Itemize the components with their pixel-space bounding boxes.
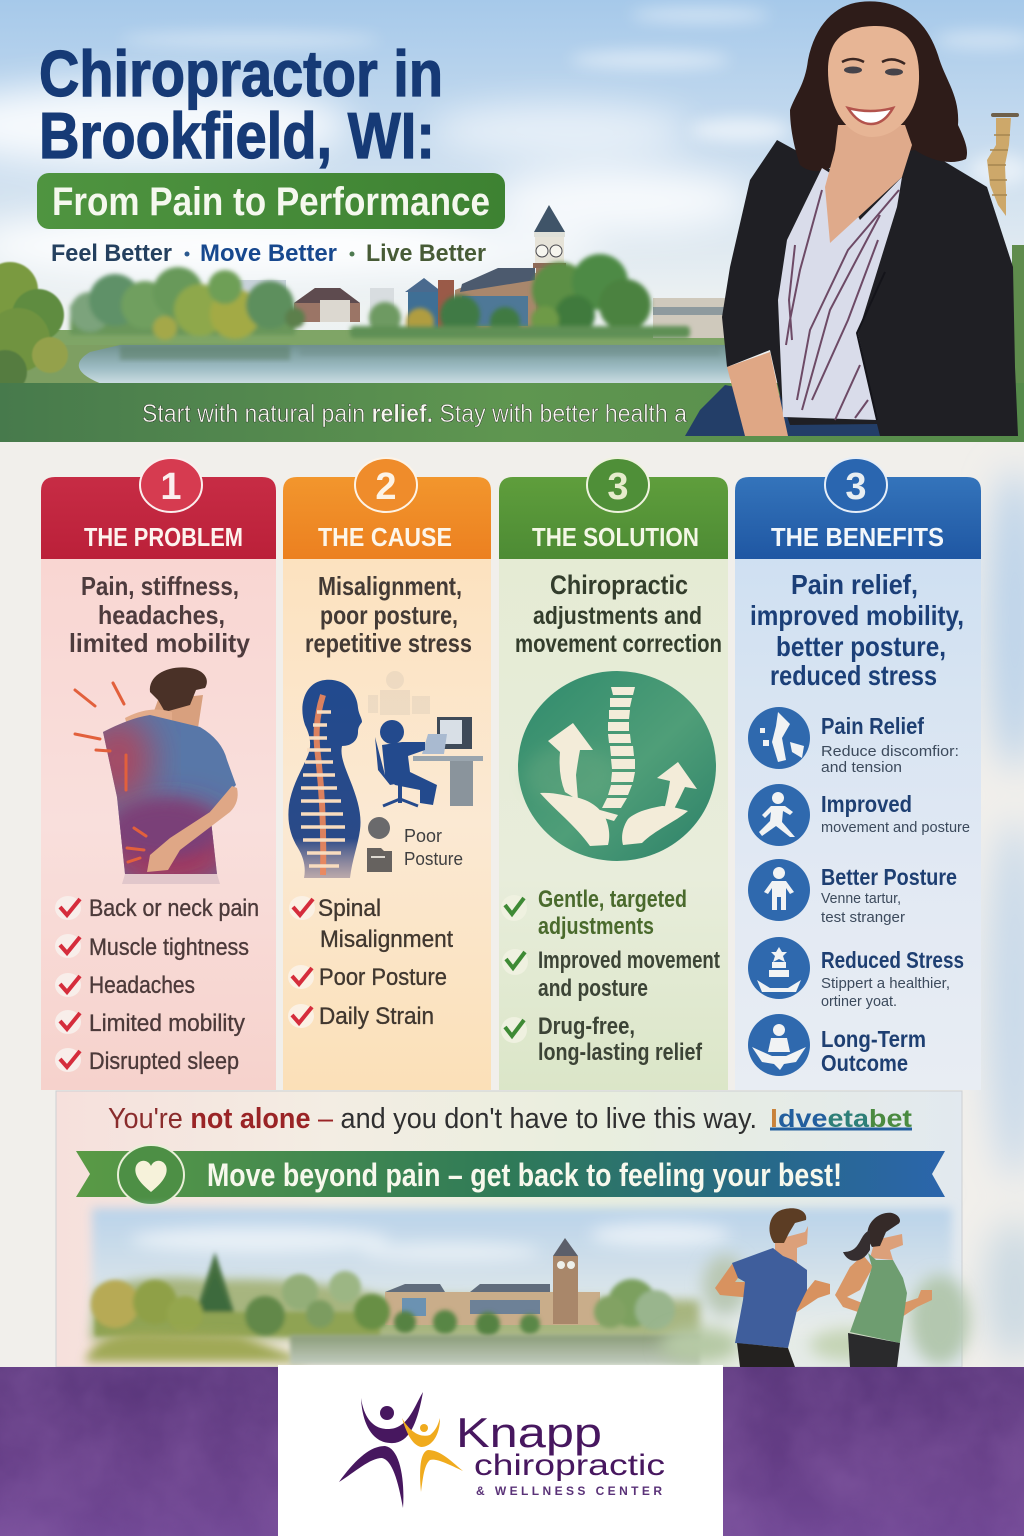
back hair bbox=[790, 1, 967, 171]
benefit: long-term outcome: Long-Term bbox=[821, 1026, 926, 1052]
right side treeline bbox=[1012, 245, 1024, 440]
illustration: spine and hands globe bbox=[518, 671, 716, 861]
logo wordmark bbox=[456, 1409, 665, 1498]
checklist: cause: Poor Posture bbox=[319, 964, 447, 991]
tagline: Feel Better bbox=[51, 240, 172, 267]
solution summary: movement correction bbox=[515, 630, 722, 658]
checklist: solution: long-lasting relief bbox=[538, 1039, 703, 1066]
purple footer band bbox=[0, 1367, 1024, 1536]
main title: Chiropractor in bbox=[39, 37, 443, 110]
cause summary: Misalignment, bbox=[318, 571, 462, 601]
checklist: problem: Headaches bbox=[89, 972, 195, 999]
illustration: spine silhouette bbox=[288, 680, 362, 878]
hero strapline: Start with natural pain relief. Stay with better health a bbox=[142, 400, 687, 428]
panel: the cause bbox=[283, 458, 491, 1090]
checklist: solution: and posture bbox=[538, 975, 648, 1002]
header: the problem bbox=[41, 458, 276, 559]
trees bbox=[91, 1252, 675, 1336]
cause summary bbox=[305, 571, 472, 658]
checklist: cause bbox=[288, 895, 453, 1030]
benefit: long-term outcome bbox=[748, 1014, 926, 1076]
header: the benefits bbox=[735, 458, 981, 559]
problem summary: limited mobility bbox=[69, 628, 251, 658]
header: the solution: THE SOLUTION bbox=[532, 522, 699, 552]
benefits summary: better posture, bbox=[776, 631, 946, 662]
icon: heart badge bbox=[118, 1145, 184, 1205]
panel: the solution bbox=[499, 458, 728, 1090]
checklist: problem: Back or neck pain bbox=[89, 895, 259, 922]
benefit: reduced stress: ortiner yoat. bbox=[821, 993, 897, 1010]
blouse bbox=[778, 125, 912, 420]
benefit: better posture: Better Posture bbox=[821, 864, 957, 890]
tagline: Live Better bbox=[366, 240, 486, 267]
header: the solution bbox=[499, 458, 728, 559]
solution summary: adjustments and bbox=[533, 602, 702, 630]
benefit: pain relief: Reduce discomfior: bbox=[821, 743, 959, 760]
far hills bbox=[90, 1278, 700, 1340]
jeans bbox=[685, 385, 885, 436]
checklist: problem: Disrupted sleep bbox=[89, 1048, 239, 1075]
benefit: better posture bbox=[748, 859, 957, 926]
illustration: man with back pain bbox=[75, 667, 238, 892]
reassurance panel bbox=[56, 1091, 970, 1367]
benefit: better posture: test stranger bbox=[821, 909, 905, 926]
poor posture note bbox=[367, 817, 463, 872]
campus building and clock tower bbox=[385, 1238, 600, 1325]
benefits summary: reduced stress bbox=[770, 660, 937, 691]
lower landscape scene bbox=[85, 1208, 970, 1367]
checklist: solution bbox=[501, 886, 720, 1066]
grass strip bbox=[0, 383, 1024, 442]
checklist: cause: Misalignment bbox=[320, 926, 453, 953]
tagline bbox=[51, 240, 486, 267]
panel: the benefits bbox=[735, 458, 981, 1090]
ribbon banner: Move beyond pain – get back to feeling your best! bbox=[207, 1157, 842, 1193]
logo wordmark: chiropractic bbox=[474, 1449, 665, 1482]
sky with clouds bbox=[0, 0, 1024, 442]
runner: man bbox=[715, 1208, 830, 1367]
checklist: problem: Muscle tightness bbox=[89, 934, 249, 961]
solution summary: Chiropractic bbox=[550, 570, 688, 600]
main title bbox=[39, 37, 443, 172]
checklist: problem bbox=[55, 895, 259, 1075]
garbled wordmark: ldve etabet bbox=[770, 1105, 913, 1133]
right side sky wash bbox=[985, 470, 1024, 1360]
benefits summary bbox=[750, 569, 964, 691]
benefit: improved bbox=[748, 784, 970, 846]
benefit: better posture: Venne tartur, bbox=[821, 890, 901, 907]
jacket bbox=[722, 138, 1018, 436]
header: the benefits: THE BENEFITS bbox=[771, 522, 944, 552]
poor posture note: Poor bbox=[404, 826, 442, 846]
header: the cause: 2 bbox=[375, 466, 397, 508]
header: the problem: THE PROBLEM bbox=[84, 522, 243, 552]
header: the cause: THE CAUSE bbox=[318, 522, 452, 552]
checklist: cause: Daily Strain bbox=[319, 1003, 434, 1030]
cause summary: poor posture, bbox=[320, 600, 458, 630]
header: the benefits: 3 bbox=[845, 466, 867, 508]
header: the problem: 1 bbox=[160, 466, 182, 508]
runner: woman bbox=[835, 1213, 932, 1367]
foreground shrubs bbox=[85, 1332, 310, 1362]
lakeside landscape bbox=[0, 205, 1024, 442]
benefits summary: Pain relief, bbox=[791, 569, 918, 600]
problem summary: headaches, bbox=[98, 600, 225, 630]
face bbox=[828, 26, 919, 137]
problem summary: Pain, stiffness, bbox=[81, 571, 239, 601]
paper background bbox=[0, 440, 1024, 1370]
panel: the problem bbox=[41, 458, 276, 1090]
checklist: cause: Spinal bbox=[318, 895, 381, 922]
benefit: reduced stress: Stippert a healthier, bbox=[821, 975, 950, 992]
logo card bbox=[278, 1365, 723, 1536]
solution summary bbox=[515, 570, 722, 658]
cause summary: repetitive stress bbox=[305, 628, 472, 658]
benefit: reduced stress bbox=[748, 937, 964, 1010]
spine sculpture bbox=[987, 113, 1019, 216]
checklist: solution: Improved movement bbox=[538, 947, 720, 974]
clock tower bbox=[533, 205, 566, 316]
checklist: solution: adjustments bbox=[538, 913, 654, 940]
far buildings bbox=[220, 268, 725, 338]
portrait bbox=[685, 1, 1018, 436]
benefit: reduced stress: Reduced Stress bbox=[821, 947, 964, 973]
message line: You're not alone – and you don't have to live this way. bbox=[108, 1103, 757, 1135]
tree groups bbox=[70, 254, 690, 340]
benefit: pain relief bbox=[748, 707, 959, 776]
main title: Brookfield, WI: bbox=[39, 99, 435, 172]
benefits summary: improved mobility, bbox=[750, 600, 964, 631]
checklist: problem: Limited mobility bbox=[89, 1010, 245, 1037]
logo wordmark: & WELLNESS CENTER bbox=[476, 1484, 662, 1498]
poor posture note: Posture bbox=[404, 849, 463, 869]
problem summary bbox=[69, 571, 251, 658]
illustration: desk worker bbox=[368, 671, 483, 806]
pond bbox=[290, 1335, 700, 1365]
forearm bbox=[727, 352, 788, 436]
ribbon banner bbox=[76, 1145, 945, 1205]
benefit: improved: Improved bbox=[821, 791, 912, 817]
checklist: solution: Gentle, targeted bbox=[538, 886, 687, 913]
left foreground tree bbox=[0, 262, 68, 394]
benefit: long-term outcome: Outcome bbox=[821, 1050, 908, 1076]
misty bushes bbox=[660, 1255, 970, 1365]
benefit: improved: movement and posture bbox=[821, 819, 970, 836]
checklist: solution: Drug-free, bbox=[538, 1013, 635, 1040]
benefit: pain relief: and tension bbox=[821, 759, 902, 776]
benefit: pain relief: Pain Relief bbox=[821, 713, 924, 739]
header: the solution: 3 bbox=[607, 466, 629, 508]
hero banner bbox=[0, 0, 1024, 442]
tagline: Move Better bbox=[200, 240, 337, 267]
logo mark bbox=[339, 1392, 463, 1508]
header: the cause bbox=[283, 458, 491, 559]
subtitle pill: From Pain to Performance bbox=[52, 180, 490, 224]
logo wordmark: Knapp bbox=[456, 1409, 602, 1456]
